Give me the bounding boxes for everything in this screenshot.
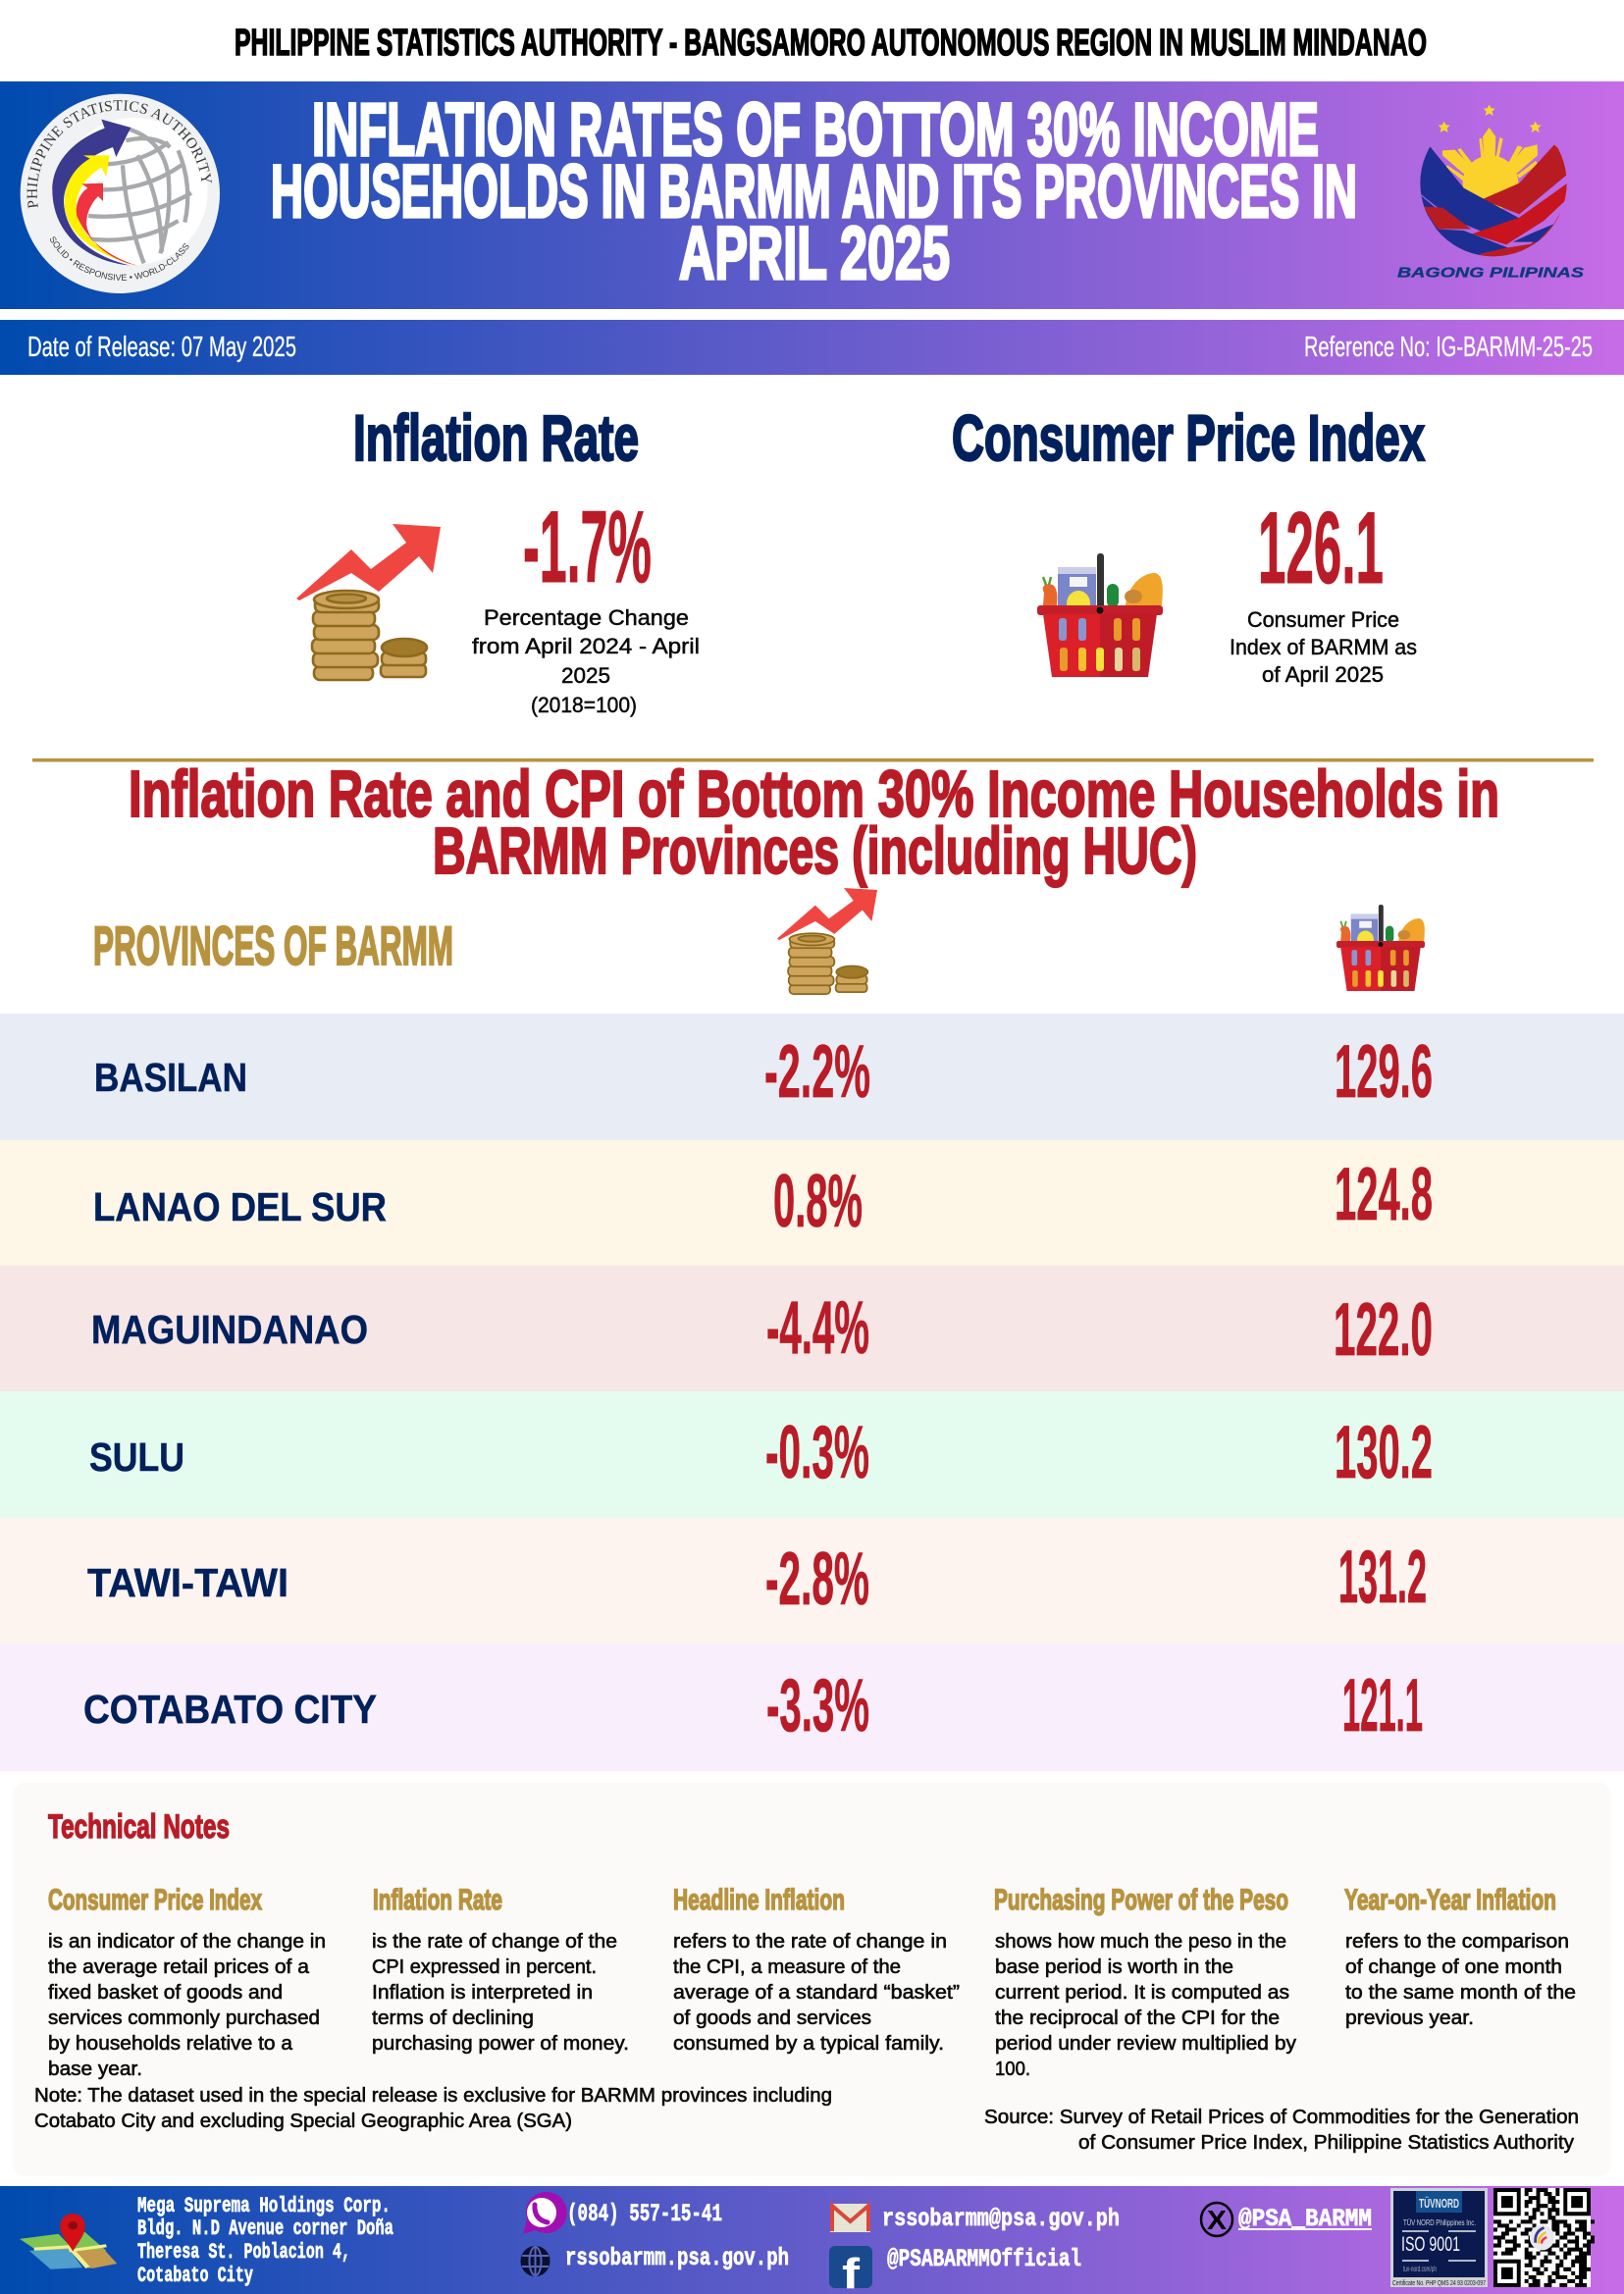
CPI caption: Index of BARMM as xyxy=(1230,635,1417,659)
row: Cotabato City: 121.1 xyxy=(1342,1664,1423,1747)
section heading xyxy=(129,757,1499,888)
column heading: provinces: PROVINCES OF BARMM xyxy=(93,914,453,976)
panel: consumer price index summary: 126.1 xyxy=(1258,492,1384,605)
title: APRIL 2025 xyxy=(679,212,950,295)
row: Basilan: -2.2% xyxy=(764,1030,870,1114)
section heading: BARMM Provinces (including HUC) xyxy=(433,814,1197,888)
footer xyxy=(0,2186,1624,2294)
dataset note: Note: The dataset used in the special release is exclusive for BARMM provinces including xyxy=(34,2085,832,2107)
row: Tawi-Tawi: TAWI-TAWI xyxy=(87,1560,288,1605)
note: headline inflation: the CPI, a measure of the xyxy=(673,1956,901,1978)
icon: PSA logo xyxy=(20,94,220,293)
address: Mega Suprema Holdings Corp. xyxy=(137,2194,391,2218)
icon: rising arrow and coins xyxy=(296,524,441,680)
icon: inflation column xyxy=(777,888,877,994)
note: inflation rate: purchasing power of money. xyxy=(372,2033,629,2055)
QR code xyxy=(1493,2188,1595,2287)
panel: consumer price index summary xyxy=(952,401,1425,687)
row: Maguindanao: MAGUINDANAO xyxy=(91,1307,368,1352)
address: Theresa St. Poblacion 4, xyxy=(137,2240,350,2265)
icon: PSA logo: SOLID • RESPONSIVE • WORLD-CLASS xyxy=(49,236,188,281)
heading: inflation rate: Inflation Rate xyxy=(353,401,639,474)
note: year-on-year inflation xyxy=(1344,1884,1576,2029)
note: inflation rate xyxy=(372,1884,629,2055)
panel: inflation rate summary: -1.7% xyxy=(523,491,652,604)
note: purchasing power of the peso xyxy=(994,1884,1296,2080)
row: Sulu: -0.3% xyxy=(765,1411,869,1494)
header banner xyxy=(0,81,1624,309)
note: consumer price index: base year. xyxy=(48,2059,142,2080)
table header xyxy=(93,888,1425,994)
note: purchasing power of the peso: shows how much the peso in the xyxy=(995,1931,1286,1953)
note: inflation rate: is the rate of change of the xyxy=(372,1931,617,1953)
inflation caption: from April 2024 - April xyxy=(472,634,700,658)
row: Maguindanao: -4.4% xyxy=(766,1286,869,1370)
note: year-on-year inflation: refers to the comparison xyxy=(1345,1931,1569,1953)
note: purchasing power of the peso: the reciprocal of the CPI for the xyxy=(995,2007,1280,2029)
row: Tawi-Tawi: -2.8% xyxy=(765,1538,869,1621)
note: consumer price index xyxy=(48,1884,326,2080)
CPI caption: of April 2025 xyxy=(1262,662,1384,687)
icon: PSA logo: PHILIPPINE STATISTICS AUTHORITY xyxy=(27,100,212,209)
date of release: Date of Release: 07 May 2025 xyxy=(27,332,296,363)
address xyxy=(137,2194,393,2288)
row: Tawi-Tawi: 131.2 xyxy=(1338,1536,1427,1619)
note: headline inflation: Headline Inflation xyxy=(673,1884,845,1916)
note: purchasing power of the peso: 100. xyxy=(995,2059,1030,2080)
icon: X: X xyxy=(1207,2205,1227,2235)
inflation caption: Percentage Change xyxy=(484,605,689,630)
icon: X xyxy=(1201,2203,1232,2236)
dataset note xyxy=(34,2085,832,2132)
icon: globe xyxy=(522,2247,550,2275)
icon: grocery basket xyxy=(1037,553,1163,677)
ISO 9001 badge: tuv-nord.com/ph xyxy=(1403,2265,1437,2273)
row: Maguindanao: 122.0 xyxy=(1334,1288,1433,1372)
icon: CPI column xyxy=(1336,905,1425,991)
note: consumer price index: by households relative to a xyxy=(48,2033,293,2055)
note: year-on-year inflation: of change of one month xyxy=(1345,1956,1562,1978)
note: headline inflation: consumed by a typical family. xyxy=(673,2033,944,2055)
phone number: (084) 557-15-41 xyxy=(567,2200,722,2228)
icon: Bagong Pilipinas logo: BAGONG PILIPINAS xyxy=(1397,265,1584,281)
release information bar xyxy=(0,320,1624,375)
note: inflation rate: terms of declining xyxy=(372,2007,534,2029)
row: Cotabato City xyxy=(0,1643,1624,1771)
note: inflation rate: Inflation Rate xyxy=(373,1884,502,1916)
note: headline inflation: refers to the rate of change in xyxy=(673,1931,947,1953)
ISO 9001 badge: TÜV NORD Philippines Inc. xyxy=(1403,2218,1476,2227)
address: Bldg. N.D Avenue corner Doña xyxy=(137,2216,393,2241)
icon: phone xyxy=(523,2192,567,2234)
note: year-on-year inflation: previous year. xyxy=(1345,2007,1474,2029)
source note: of Consumer Price Index, Philippine Statistics Authority xyxy=(1078,2132,1574,2154)
row: Cotabato City: -3.3% xyxy=(766,1664,869,1747)
note: headline inflation: average of a standard “basket” xyxy=(673,1982,960,2004)
ISO 9001 badge xyxy=(1390,2188,1488,2287)
icon: Facebook xyxy=(829,2246,872,2294)
note: purchasing power of the peso: Purchasing Power of the Peso xyxy=(994,1884,1288,1916)
Facebook handle: @PSABARMMOfficial xyxy=(887,2245,1081,2273)
row: Cotabato City: COTABATO CITY xyxy=(83,1687,377,1732)
note: consumer price index: the average retail prices of a xyxy=(48,1956,310,1978)
panel: inflation rate summary xyxy=(296,401,700,717)
note: purchasing power of the peso: current period. It is computed as xyxy=(995,1982,1289,2004)
row: Lanao del Sur: LANAO DEL SUR xyxy=(93,1184,387,1229)
note: year-on-year inflation: to the same month of the xyxy=(1345,1982,1576,2004)
ISO 9001 badge: Certificate No. PHP QMS 24 93 0203-097 xyxy=(1392,2280,1486,2287)
note: headline inflation xyxy=(673,1884,960,2055)
row: Sulu xyxy=(0,1391,1624,1518)
note: consumer price index: fixed basket of goods and xyxy=(48,1982,283,2004)
inflation caption xyxy=(472,605,700,717)
heading: technical notes: Technical Notes xyxy=(48,1808,230,1846)
address: Cotabato City xyxy=(137,2264,253,2288)
email address: rssobarmm@psa.gov.ph xyxy=(882,2205,1120,2233)
row: Lanao del Sur xyxy=(0,1140,1624,1266)
ISO 9001 badge: TÜVNORD xyxy=(1419,2196,1459,2211)
note: inflation rate: Inflation is interpreted in xyxy=(372,1982,593,2004)
row: Lanao del Sur: 0.8% xyxy=(773,1160,863,1243)
ISO 9001 badge: ISO 9001 xyxy=(1401,2233,1460,2256)
note: consumer price index: Consumer Price Index xyxy=(48,1884,262,1916)
X handle: @PSA_BARMM xyxy=(1238,2205,1372,2233)
source note xyxy=(984,2107,1579,2154)
heading: consumer price index: Consumer Price Index xyxy=(952,401,1425,474)
icon: Bagong Pilipinas logo xyxy=(1397,105,1584,281)
row: Basilan xyxy=(0,1014,1624,1140)
row: Maguindanao xyxy=(0,1266,1624,1391)
note: headline inflation: of goods and services xyxy=(673,2007,871,2029)
dataset note: Cotabato City and excluding Special Geographic Area (SGA) xyxy=(34,2111,572,2132)
row: Sulu: SULU xyxy=(89,1434,184,1480)
note: purchasing power of the peso: base period is worth in the xyxy=(995,1956,1233,1978)
CPI caption: Consumer Price xyxy=(1247,607,1399,632)
row: Tawi-Tawi xyxy=(0,1518,1624,1643)
source note: Source: Survey of Retail Prices of Commodities for the Generation xyxy=(984,2107,1579,2128)
row: Basilan: 129.6 xyxy=(1335,1030,1433,1114)
note: purchasing power of the peso: period under review multiplied by xyxy=(995,2033,1296,2055)
table: provinces xyxy=(0,1014,1624,1771)
website: rssobarmm.psa.gov.ph xyxy=(565,2244,789,2272)
inflation caption: (2018=100) xyxy=(531,693,637,717)
note: consumer price index: services commonly purchased xyxy=(48,2007,320,2029)
icon: map pin xyxy=(20,2214,117,2269)
row: Lanao del Sur: 124.8 xyxy=(1335,1153,1433,1236)
note: inflation rate: CPI expressed in percent. xyxy=(372,1956,597,1978)
note: consumer price index: is an indicator of the change in xyxy=(48,1931,326,1953)
title xyxy=(271,88,1357,295)
panel: technical notes xyxy=(13,1783,1611,2176)
icon: email xyxy=(830,2204,870,2232)
inflation caption: 2025 xyxy=(561,663,610,688)
row: Sulu: 130.2 xyxy=(1335,1411,1433,1494)
CPI caption xyxy=(1230,607,1417,687)
row: Basilan: BASILAN xyxy=(94,1055,247,1100)
